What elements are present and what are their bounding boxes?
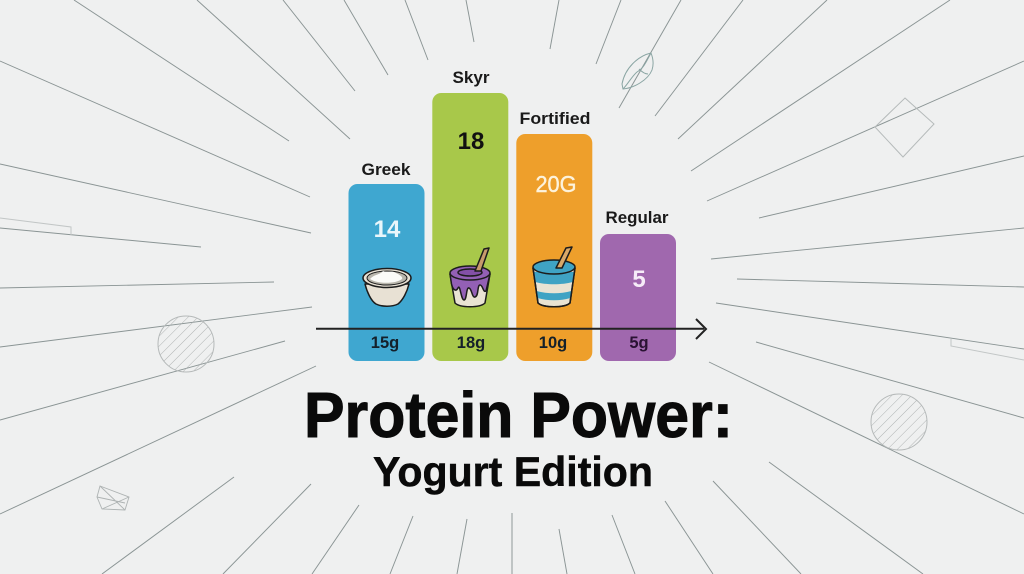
bar chart [316, 68, 706, 361]
bar: Greek [348, 160, 424, 361]
icon: hatched circle left [158, 316, 214, 372]
gram label: 15g: 15g [371, 334, 399, 352]
value: 14: 14 [374, 216, 401, 243]
icon: sketched envelope [97, 486, 129, 510]
decorative strip right [951, 339, 1024, 360]
value: 5: 5 [632, 266, 646, 293]
decorative strip left [0, 218, 71, 235]
gram label: 5g: 5g [629, 334, 649, 352]
subtitle: Yogurt Edition [373, 448, 653, 495]
label: Skyr: Skyr [452, 68, 490, 87]
icon: sketched leaf [622, 53, 653, 89]
icon: fortified cup with stripes [533, 247, 575, 307]
gram label: 10g: 10g [539, 334, 567, 352]
bar: Skyr [432, 68, 508, 361]
icon: hatched circle right [871, 394, 927, 450]
value: 18: 18 [458, 128, 484, 155]
label: Fortified: Fortified [520, 109, 590, 128]
label: Greek: Greek [362, 160, 411, 179]
bar: Fortified [516, 109, 592, 361]
value: 20G: 20G [536, 171, 576, 197]
icon: yogurt bowl [363, 268, 411, 306]
title: Protein Power: [304, 379, 733, 451]
gram label: 18g: 18g [457, 334, 485, 352]
bar: Regular [600, 208, 676, 361]
icon: skyr cup with spoon [450, 248, 490, 307]
axis arrow [316, 319, 706, 339]
label: Regular: Regular [606, 208, 669, 227]
icon: sketched diamond [875, 98, 934, 157]
